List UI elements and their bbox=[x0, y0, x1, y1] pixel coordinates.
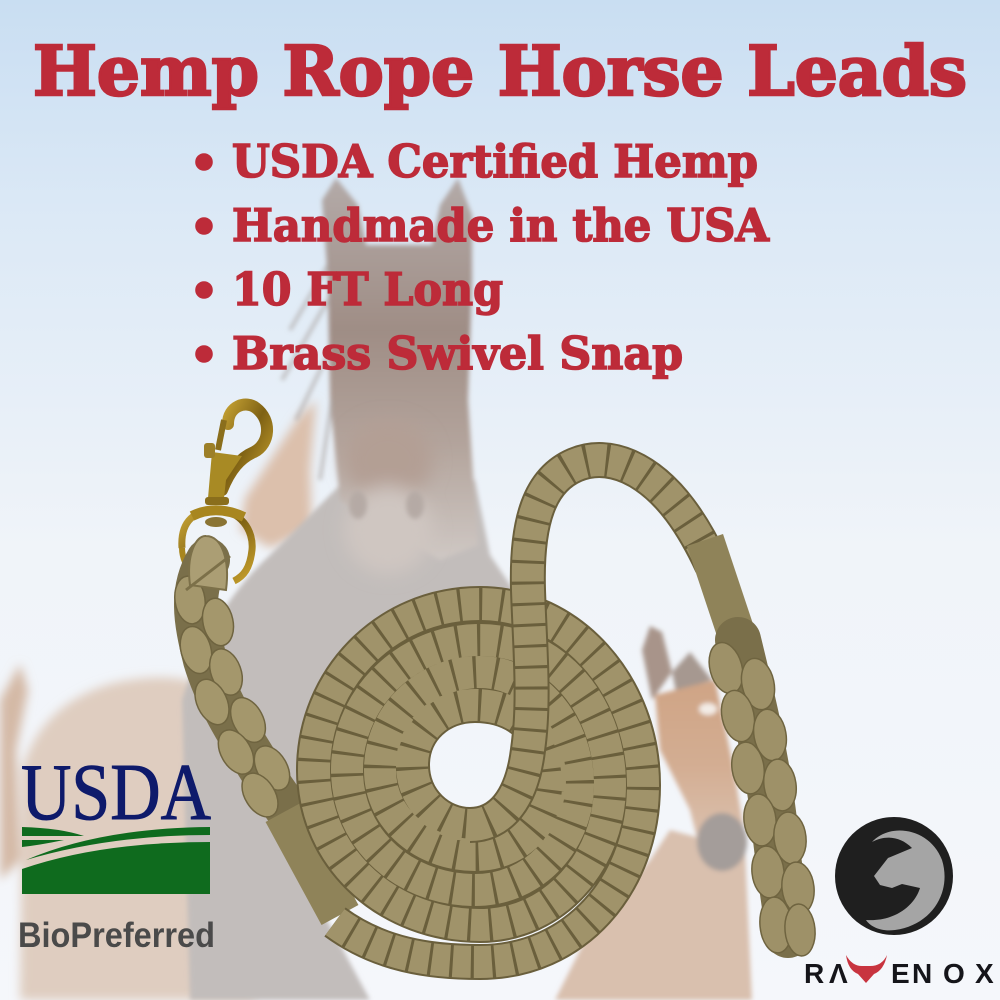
horse: bottom-left body bbox=[0, 664, 255, 1000]
horse: back-left head bbox=[240, 400, 316, 548]
horse: right foal bbox=[555, 626, 752, 1000]
rope: braided end near snap bbox=[172, 560, 305, 835]
bullet 3: 10 FT Long bbox=[232, 263, 503, 316]
RAVENOX wordmark: E bbox=[891, 958, 910, 989]
RAVENOX wordmark: N bbox=[912, 958, 932, 989]
RAVENOX wordmark bbox=[804, 958, 994, 989]
hemp rope lead bbox=[172, 460, 817, 962]
horses background bbox=[0, 178, 752, 1000]
rope: rising loop bbox=[470, 460, 712, 825]
swivel ring bbox=[182, 510, 252, 581]
USDA BioPreferred logo bbox=[18, 749, 215, 955]
RAVENOX wordmark: X bbox=[975, 958, 994, 989]
bullet 2: Handmade in the USA bbox=[232, 199, 770, 252]
brass swivel snap bbox=[182, 405, 267, 581]
green field mark bbox=[22, 827, 210, 894]
Ravenox logo bbox=[804, 817, 994, 989]
snap hook bbox=[222, 405, 267, 490]
feature list bbox=[196, 135, 770, 380]
horse: central main bbox=[182, 178, 515, 1000]
USDA wordmark: USDA bbox=[21, 749, 211, 837]
RAVENOX wordmark: Λ bbox=[829, 958, 848, 989]
rope: knot at snap bbox=[186, 536, 230, 590]
RAVENOX wordmark: O bbox=[943, 958, 965, 989]
bullet 4: Brass Swivel Snap bbox=[232, 327, 683, 380]
rope: coil bbox=[314, 604, 643, 962]
red horns mark bbox=[846, 955, 887, 983]
BioPreferred wordmark: BioPreferred bbox=[18, 916, 215, 955]
rope: lower whipped section bbox=[284, 812, 340, 915]
rope: whipped section and braided tail bbox=[704, 540, 817, 957]
round emblem bbox=[835, 817, 953, 935]
RAVENOX wordmark: R bbox=[804, 958, 824, 989]
bullet 1: USDA Certified Hemp bbox=[232, 135, 758, 188]
title: Hemp Rope Horse Leads bbox=[33, 32, 967, 112]
